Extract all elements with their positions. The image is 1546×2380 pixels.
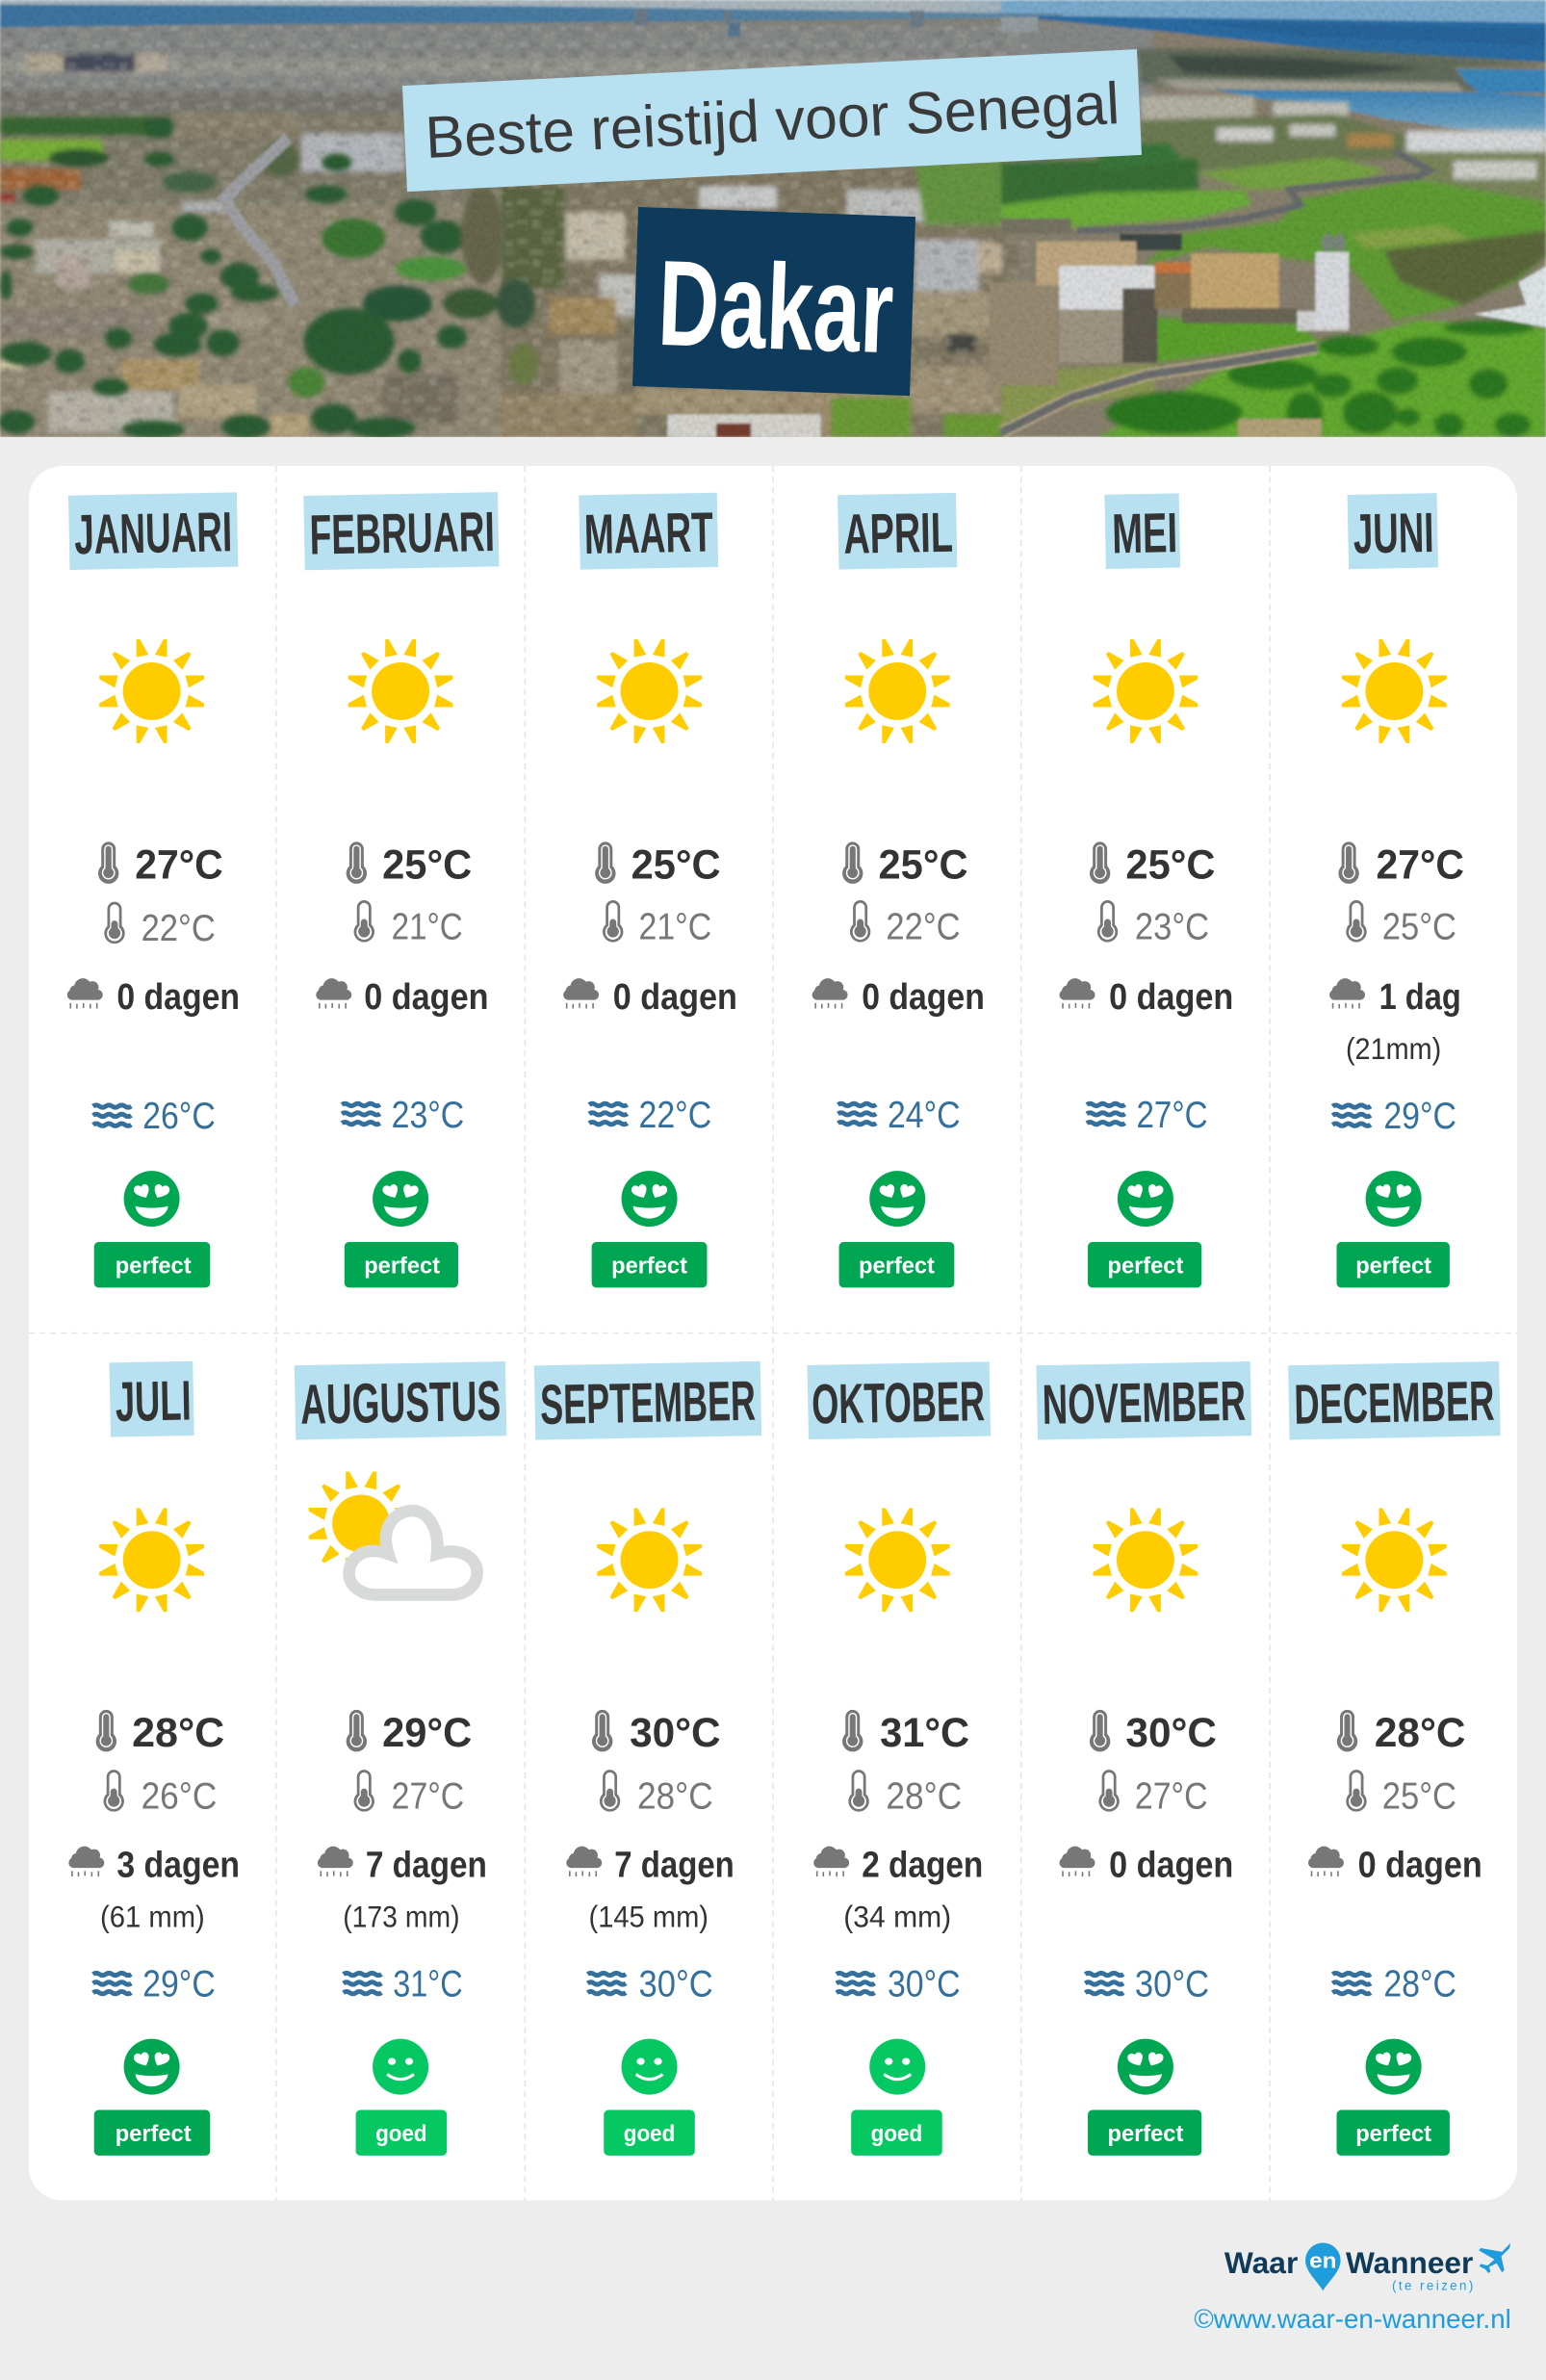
sea temperature: 31°C bbox=[393, 1963, 463, 2005]
night temperature bbox=[850, 900, 961, 948]
rating: perfect bbox=[1337, 1171, 1450, 1287]
sea temperature: 22°C bbox=[639, 1095, 711, 1136]
logo: Waar en Wanneer: (te reizen) bbox=[1392, 2278, 1473, 2292]
night temperature: 21°C bbox=[639, 907, 711, 948]
rating: perfect bbox=[94, 2039, 210, 2156]
buildings right bbox=[1120, 234, 1182, 250]
daytime temperature bbox=[1338, 841, 1464, 889]
sea temperature bbox=[93, 1096, 216, 1137]
rating: perfect bbox=[1088, 1171, 1201, 1287]
rating: perfect bbox=[1088, 2039, 1201, 2156]
night temperature: 25°C bbox=[1382, 1776, 1456, 1818]
icon: sun bbox=[845, 1508, 950, 1612]
daytime temperature: 27°C bbox=[135, 842, 223, 889]
night temperature: 22°C bbox=[886, 907, 961, 948]
month: april bbox=[812, 493, 985, 1287]
icon: sun bbox=[348, 639, 452, 743]
month label bbox=[1104, 493, 1180, 569]
roads bbox=[224, 138, 1430, 432]
daytime temperature bbox=[347, 841, 472, 889]
night temperature bbox=[1097, 900, 1209, 948]
rating: perfect: perfect bbox=[1355, 2121, 1431, 2147]
sea temperature: 24°C bbox=[888, 1095, 961, 1136]
night temperature bbox=[1346, 900, 1456, 948]
sea temperature: 30°C bbox=[888, 1963, 961, 2005]
daytime temperature: 28°C bbox=[132, 1710, 224, 1756]
rain days: 2 dagen bbox=[862, 1846, 983, 1886]
icon: sun bbox=[845, 639, 950, 743]
month: januari bbox=[67, 492, 240, 1287]
rain days: 0 dagen bbox=[862, 977, 985, 1018]
month label bbox=[295, 1361, 506, 1439]
month label: NOVEMBER bbox=[1042, 1370, 1247, 1436]
month: juli bbox=[68, 1361, 240, 2156]
daytime temperature: 29°C bbox=[382, 1710, 472, 1756]
month: augustus bbox=[295, 1361, 506, 2156]
rating: perfect bbox=[839, 1171, 954, 1287]
month: juni bbox=[1329, 493, 1464, 1287]
night temperature: 21°C bbox=[392, 907, 463, 948]
daytime temperature bbox=[98, 841, 223, 889]
rain days: 7 dagen bbox=[366, 1846, 487, 1886]
night temperature bbox=[1346, 1770, 1456, 1818]
month label bbox=[303, 492, 499, 570]
icon: sun bbox=[1094, 639, 1198, 743]
sea temperature bbox=[93, 1963, 216, 2005]
icon: sun bbox=[1342, 1508, 1447, 1612]
rating: perfect bbox=[345, 1171, 458, 1287]
rain days bbox=[67, 977, 240, 1018]
night temperature bbox=[600, 1770, 713, 1818]
sky and sea bbox=[0, 0, 1003, 14]
month label: MAART bbox=[583, 501, 713, 566]
sea temperature bbox=[837, 1963, 961, 2005]
sea temperature: 30°C bbox=[1135, 1963, 1209, 2005]
logo: Waar en Wanneer bbox=[1224, 2242, 1510, 2292]
icon: sun bbox=[1094, 1508, 1198, 1612]
icon: sun bbox=[99, 639, 204, 743]
rating: perfect: perfect bbox=[116, 2121, 192, 2147]
night temperature bbox=[1098, 1770, 1208, 1818]
rain days: 0 dagen bbox=[1358, 1846, 1482, 1886]
daytime temperature: 30°C bbox=[1125, 1710, 1217, 1756]
month: maart bbox=[563, 493, 737, 1287]
daytime temperature: 31°C bbox=[880, 1710, 969, 1756]
rain days bbox=[1329, 977, 1461, 1066]
rain days: 0 dagen bbox=[1109, 1846, 1233, 1886]
rating: goed: goed bbox=[871, 2121, 922, 2147]
daytime temperature bbox=[1090, 841, 1215, 889]
icon: airplane bbox=[1479, 2243, 1510, 2273]
night temperature bbox=[354, 900, 463, 948]
month label: JANUARI bbox=[74, 501, 233, 566]
sea temperature bbox=[589, 1095, 711, 1136]
month: november bbox=[1037, 1361, 1251, 2156]
sea temperature: 28°C bbox=[1383, 1963, 1456, 2005]
month label: AUGUSTUS bbox=[300, 1370, 502, 1436]
sea temperature: 23°C bbox=[392, 1095, 464, 1136]
city banner: Dakar bbox=[632, 207, 915, 396]
rain days: 0 dagen bbox=[116, 977, 240, 1018]
month label: JULI bbox=[115, 1369, 192, 1434]
daytime temperature: 27°C bbox=[1376, 842, 1464, 889]
title banner: Beste reistijd voor Senegal bbox=[424, 70, 1121, 171]
night temperature: 26°C bbox=[142, 1776, 217, 1818]
night temperature: 28°C bbox=[886, 1776, 962, 1818]
rating: goed: goed bbox=[624, 2121, 675, 2147]
month: september bbox=[534, 1361, 761, 2156]
trees left and centre bbox=[0, 116, 538, 439]
night temperature bbox=[848, 1770, 962, 1818]
sea temperature: 29°C bbox=[1383, 1096, 1456, 1137]
rating: perfect: perfect bbox=[611, 1253, 687, 1279]
month label bbox=[534, 1361, 761, 1440]
sea temperature: 27°C bbox=[1136, 1095, 1208, 1136]
night temperature: 25°C bbox=[1382, 907, 1456, 948]
month: december bbox=[1288, 1361, 1501, 2156]
sea temperature bbox=[344, 1963, 463, 2005]
rain days bbox=[566, 1846, 734, 1934]
sea temperature bbox=[587, 1963, 713, 2005]
daytime temperature: 25°C bbox=[879, 842, 968, 889]
month label bbox=[68, 492, 238, 570]
rating: perfect: perfect bbox=[859, 1253, 935, 1279]
icon: sun bbox=[597, 1508, 702, 1612]
night temperature: 23°C bbox=[1135, 907, 1209, 948]
night temperature: 27°C bbox=[392, 1776, 464, 1818]
icon: sun bbox=[1342, 639, 1447, 743]
rating: perfect bbox=[94, 1171, 210, 1287]
logo: Waar en Wanneer: Waar bbox=[1224, 2245, 1298, 2280]
sea temperature: 29°C bbox=[142, 1963, 216, 2005]
rain days: (145 mm) bbox=[589, 1900, 709, 1934]
rating: goed bbox=[851, 2039, 942, 2156]
rain days bbox=[1060, 1846, 1233, 1886]
month label bbox=[579, 493, 718, 570]
rain days: (173 mm) bbox=[343, 1900, 460, 1934]
night temperature bbox=[603, 900, 711, 948]
rain days: (61 mm) bbox=[100, 1900, 205, 1934]
month label: JUNI bbox=[1353, 502, 1434, 566]
rain days bbox=[1060, 977, 1233, 1018]
rain days bbox=[812, 977, 985, 1018]
rain days bbox=[563, 977, 737, 1018]
daytime temperature bbox=[347, 1710, 472, 1756]
rating: perfect bbox=[592, 1171, 707, 1287]
daytime temperature bbox=[842, 841, 968, 889]
month: mei bbox=[1060, 493, 1233, 1287]
daytime temperature bbox=[595, 841, 721, 889]
rating: perfect bbox=[1337, 2039, 1450, 2156]
icon: map pin: en bbox=[1309, 2248, 1337, 2272]
rain days: (34 mm) bbox=[843, 1900, 951, 1934]
month: februari bbox=[303, 492, 499, 1287]
rain days: 3 dagen bbox=[116, 1846, 240, 1886]
rating: perfect: perfect bbox=[116, 1253, 192, 1279]
sea temperature bbox=[1332, 1096, 1456, 1137]
month: oktober bbox=[808, 1361, 991, 2156]
rain days: 0 dagen bbox=[364, 977, 488, 1018]
website credit: ©www.waar-en-wanneer.nl bbox=[1194, 2304, 1511, 2334]
rating: perfect: perfect bbox=[1108, 2121, 1183, 2147]
icon: sun bbox=[597, 639, 702, 743]
night temperature bbox=[103, 1770, 217, 1818]
daytime temperature: 30°C bbox=[630, 1710, 721, 1756]
icon: sun behind cloud bbox=[309, 1472, 477, 1594]
night temperature bbox=[104, 902, 216, 949]
sea temperature: 26°C bbox=[142, 1096, 216, 1137]
month label: FEBRUARI bbox=[309, 501, 495, 567]
rain days bbox=[318, 1846, 487, 1934]
night temperature: 28°C bbox=[637, 1776, 713, 1818]
skyline towers bbox=[634, 10, 1038, 37]
month label bbox=[1037, 1361, 1251, 1439]
rain days bbox=[813, 1846, 983, 1934]
sea temperature: 30°C bbox=[639, 1963, 713, 2005]
rain days: 0 dagen bbox=[613, 977, 737, 1018]
daytime temperature: 25°C bbox=[1125, 842, 1215, 889]
rain days: 0 dagen bbox=[1109, 977, 1233, 1018]
rain days: 7 dagen bbox=[614, 1846, 734, 1886]
panel: monthly climate grid bbox=[29, 466, 1517, 2200]
rating: perfect: perfect bbox=[1355, 1253, 1431, 1279]
rain days bbox=[316, 977, 488, 1018]
icon: sun bbox=[99, 1508, 204, 1612]
sea temperature bbox=[837, 1095, 961, 1136]
month label: OKTOBER bbox=[812, 1370, 986, 1436]
sea temperature bbox=[342, 1095, 464, 1136]
month label bbox=[110, 1361, 194, 1437]
rating: perfect: perfect bbox=[364, 1253, 440, 1279]
daytime temperature: 25°C bbox=[631, 842, 721, 889]
icon: map pin bbox=[1305, 2242, 1341, 2290]
sea temperature bbox=[1332, 1963, 1456, 2005]
month label bbox=[808, 1361, 991, 1439]
rain days: 1 dag bbox=[1379, 977, 1461, 1018]
rating: goed bbox=[356, 2039, 447, 2156]
city banner: Dakar: Dakar bbox=[656, 235, 896, 378]
sea temperature bbox=[1085, 1963, 1209, 2005]
title banner bbox=[402, 49, 1142, 192]
month label bbox=[837, 493, 957, 569]
night temperature: 22°C bbox=[142, 908, 216, 949]
daytime temperature: 28°C bbox=[1375, 1710, 1465, 1756]
month label bbox=[1348, 493, 1438, 569]
sea temperature bbox=[1087, 1095, 1208, 1136]
month label: MEI bbox=[1112, 502, 1178, 565]
rating: perfect: perfect bbox=[1108, 1253, 1183, 1279]
rain days bbox=[68, 1846, 240, 1934]
daytime temperature bbox=[842, 1710, 969, 1756]
night temperature bbox=[354, 1770, 464, 1818]
rain days: (21mm) bbox=[1346, 1031, 1441, 1066]
rating: goed: goed bbox=[375, 2121, 427, 2147]
month label: APRIL bbox=[843, 502, 953, 566]
logo: Waar en Wanneer: Wanneer bbox=[1346, 2245, 1473, 2280]
daytime temperature: 25°C bbox=[382, 842, 472, 889]
rating: goed bbox=[604, 2039, 695, 2156]
night temperature: 27°C bbox=[1135, 1776, 1208, 1818]
month label: SEPTEMBER bbox=[540, 1370, 757, 1436]
rain days bbox=[1308, 1846, 1482, 1886]
header photo: aerial view of Dakar bbox=[0, 0, 1546, 439]
